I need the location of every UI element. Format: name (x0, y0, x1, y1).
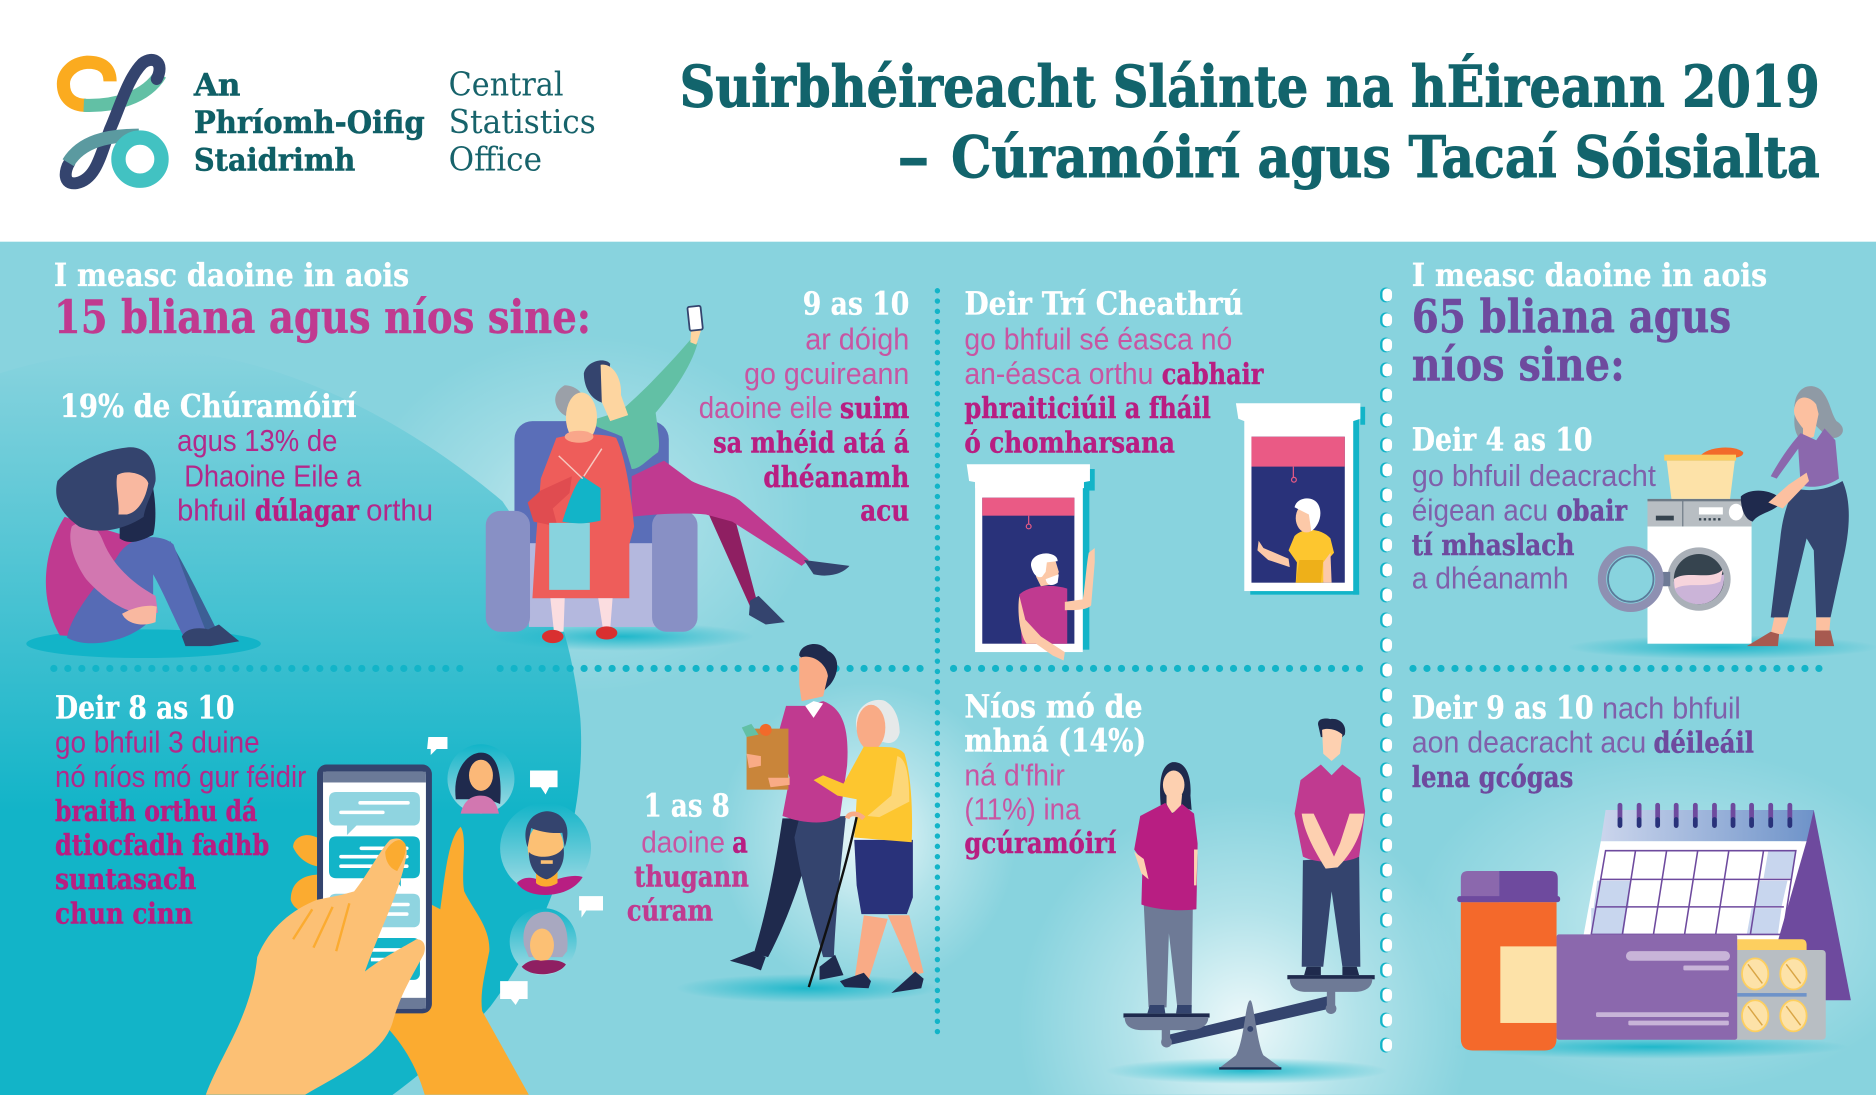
title (680, 52, 1820, 191)
text: 4 as 10 housework: go bhfuil deacracht (1412, 459, 1656, 493)
heading: 15 years and over: 15 bliana agus níos sine: (54, 290, 591, 344)
logo text: English: Office (449, 141, 542, 179)
text: 4 as 10 housework: tí mhaslach (1412, 527, 1574, 562)
heading: 15 years and over: I measc daoine in aois (54, 257, 409, 294)
text: more women carers: gcúramóirí (964, 825, 1116, 860)
text: three quarters neighbours: an-éasca orthu (964, 357, 1153, 391)
text: 9 as 10: sa mhéid atá á (713, 424, 909, 459)
text: 19% carers depressed: agus 13% de (177, 424, 337, 458)
logo: Central Statistics Office (63, 60, 596, 183)
text: 1 as 8: a (732, 825, 748, 860)
background band (0, 242, 1876, 1095)
icon: armchair with knitting grandmother and selfie woman (486, 306, 849, 651)
speech bubbles (427, 737, 447, 755)
heading: 65 years and over: 65 bliana agus (1412, 290, 1731, 344)
text: more women carers: ná d'fhir (964, 759, 1065, 793)
text: 9 as 10: ar dóigh (805, 322, 909, 356)
calendar (1582, 805, 1851, 1000)
text: 4 as 10 housework (1412, 421, 1656, 596)
text: 19% carers depressed: Dhaoine Eile a (184, 459, 361, 493)
icon: sad seated woman (26, 447, 261, 658)
medicine box (1557, 934, 1737, 1040)
text: 8 as 10 support (55, 689, 306, 931)
heading: 65 years and over: I measc daoine in aois (1412, 257, 1767, 294)
icon: window with man (967, 464, 1095, 660)
logo text: English: Central (449, 66, 564, 104)
text: 9 as 10 (699, 286, 909, 527)
text: three quarters neighbours: go bhfuil sé éasca nó (964, 322, 1232, 356)
text: 4 as 10 housework: Deir 4 as 10 (1412, 421, 1592, 458)
text: 8 as 10 support: Deir 8 as 10 (55, 689, 235, 726)
text: 1 as 8: cúram (627, 893, 713, 928)
heading: 65 years and over (1412, 257, 1767, 391)
text: 1 as 8: thugann (634, 859, 749, 894)
text: 8 as 10 support: braith orthu dá (55, 793, 257, 828)
title: – (897, 123, 930, 191)
text: 9 as 10 medication: lena gcógas (1412, 759, 1573, 794)
text: more women carers: Níos mó de (964, 688, 1143, 725)
text: 9 as 10: daoine eile (699, 391, 833, 425)
icon: window with woman (1236, 403, 1365, 595)
text: 8 as 10 support: suntasach (55, 861, 196, 896)
woman (1741, 386, 1849, 646)
text: three quarters neighbours: Deir Trí Cheathrú (964, 286, 1243, 323)
heading: 65 years and over: níos sine: (1412, 337, 1625, 391)
avatar: bearded man (500, 803, 591, 895)
back hand (383, 827, 529, 1095)
text: three quarters neighbours: phraiticiúil a fháil (964, 390, 1211, 425)
text: 9 as 10 medication: Deir 9 as 10 (1412, 689, 1594, 726)
man (730, 644, 848, 980)
text: three quarters neighbours: ó chomharsana (964, 424, 1175, 459)
laundry basket (1664, 448, 1743, 499)
text: three quarters neighbours: cabhair (1162, 356, 1264, 391)
dotted dividers (54, 291, 1825, 1047)
text: three quarters neighbours (964, 286, 1264, 459)
text: 1 as 8: daoine (641, 826, 725, 860)
armchair (486, 421, 698, 632)
logo text: Irish (193, 68, 425, 179)
text: more women carers: (11%) ina (964, 793, 1080, 827)
logo text: English: Statistics (449, 103, 596, 141)
heading: 15 years and over (54, 257, 591, 344)
man (1295, 719, 1365, 975)
avatar: woman (447, 744, 514, 814)
woman (1134, 762, 1198, 1013)
text: 9 as 10: acu (860, 492, 909, 527)
text: 9 as 10 medication: nach bhfuil (1602, 691, 1741, 725)
text: 9 as 10 medication (1412, 689, 1754, 794)
scale (1123, 975, 1375, 1070)
background glows (359, 335, 1876, 1095)
blister pack (1729, 939, 1826, 1040)
logo text: Irish: Staidrimh (194, 143, 355, 179)
text: 8 as 10 support: nó níos mó gur féidir (55, 760, 306, 794)
icon: hands holding phone (206, 765, 529, 1095)
text: 19% carers depressed: bhfuil (177, 493, 246, 527)
dark teal curved panel (0, 350, 581, 1095)
text: 19% carers depressed (60, 388, 433, 527)
logo text: Irish: An (193, 68, 240, 104)
logo text: Irish: Phríomh-Oifig (194, 105, 425, 141)
text: 4 as 10 housework: obair (1557, 492, 1628, 527)
text: 4 as 10 housework: éigean acu (1412, 493, 1548, 527)
text: 4 as 10 housework: a dhéanamh (1412, 562, 1569, 596)
phone (317, 765, 432, 1013)
text: 19% carers depressed: 19% de Chúramóirí (60, 388, 357, 425)
text: more women carers (964, 688, 1146, 860)
text: 19% carers depressed: dúlagar (255, 492, 359, 527)
text: 9 as 10: suim (840, 390, 909, 425)
text: 9 as 10 medication: déileáil (1653, 725, 1754, 760)
text: 9 as 10: go gcuireann (744, 357, 909, 391)
text: 8 as 10 support: dtiocfadh fadhb (55, 827, 269, 862)
front hand (206, 839, 425, 1095)
washing machine (1602, 499, 1752, 644)
logo mark (63, 60, 162, 183)
icon: woman at washing machine (1567, 386, 1876, 659)
icon: contact avatars and speech bubbles (427, 737, 603, 1005)
icon: young man helping elderly woman (676, 644, 939, 1003)
elderly woman (809, 700, 924, 993)
grandmother (528, 385, 634, 643)
text: 1 as 8: 1 as 8 (644, 788, 730, 825)
text: more women carers: mhná (14%) (964, 722, 1146, 759)
text: 9 as 10: 9 as 10 (803, 286, 909, 323)
selfie woman (584, 306, 849, 625)
text: 8 as 10 support: chun cinn (55, 896, 193, 931)
text: 9 as 10: dhéanamh (763, 459, 909, 494)
text: 19% carers depressed: orthu (366, 493, 433, 527)
icon: woman and man on balance scale (1106, 719, 1388, 1084)
logo text: English (449, 66, 596, 179)
icon: calendar and medication (1454, 805, 1851, 1059)
text: 8 as 10 support: go bhfuil 3 duine (55, 726, 260, 760)
text: 9 as 10 medication: aon deacracht acu (1412, 726, 1646, 760)
pill bottle (1457, 871, 1560, 1050)
text: 1 as 8 (627, 788, 749, 928)
avatar: grey-haired woman (510, 908, 577, 975)
